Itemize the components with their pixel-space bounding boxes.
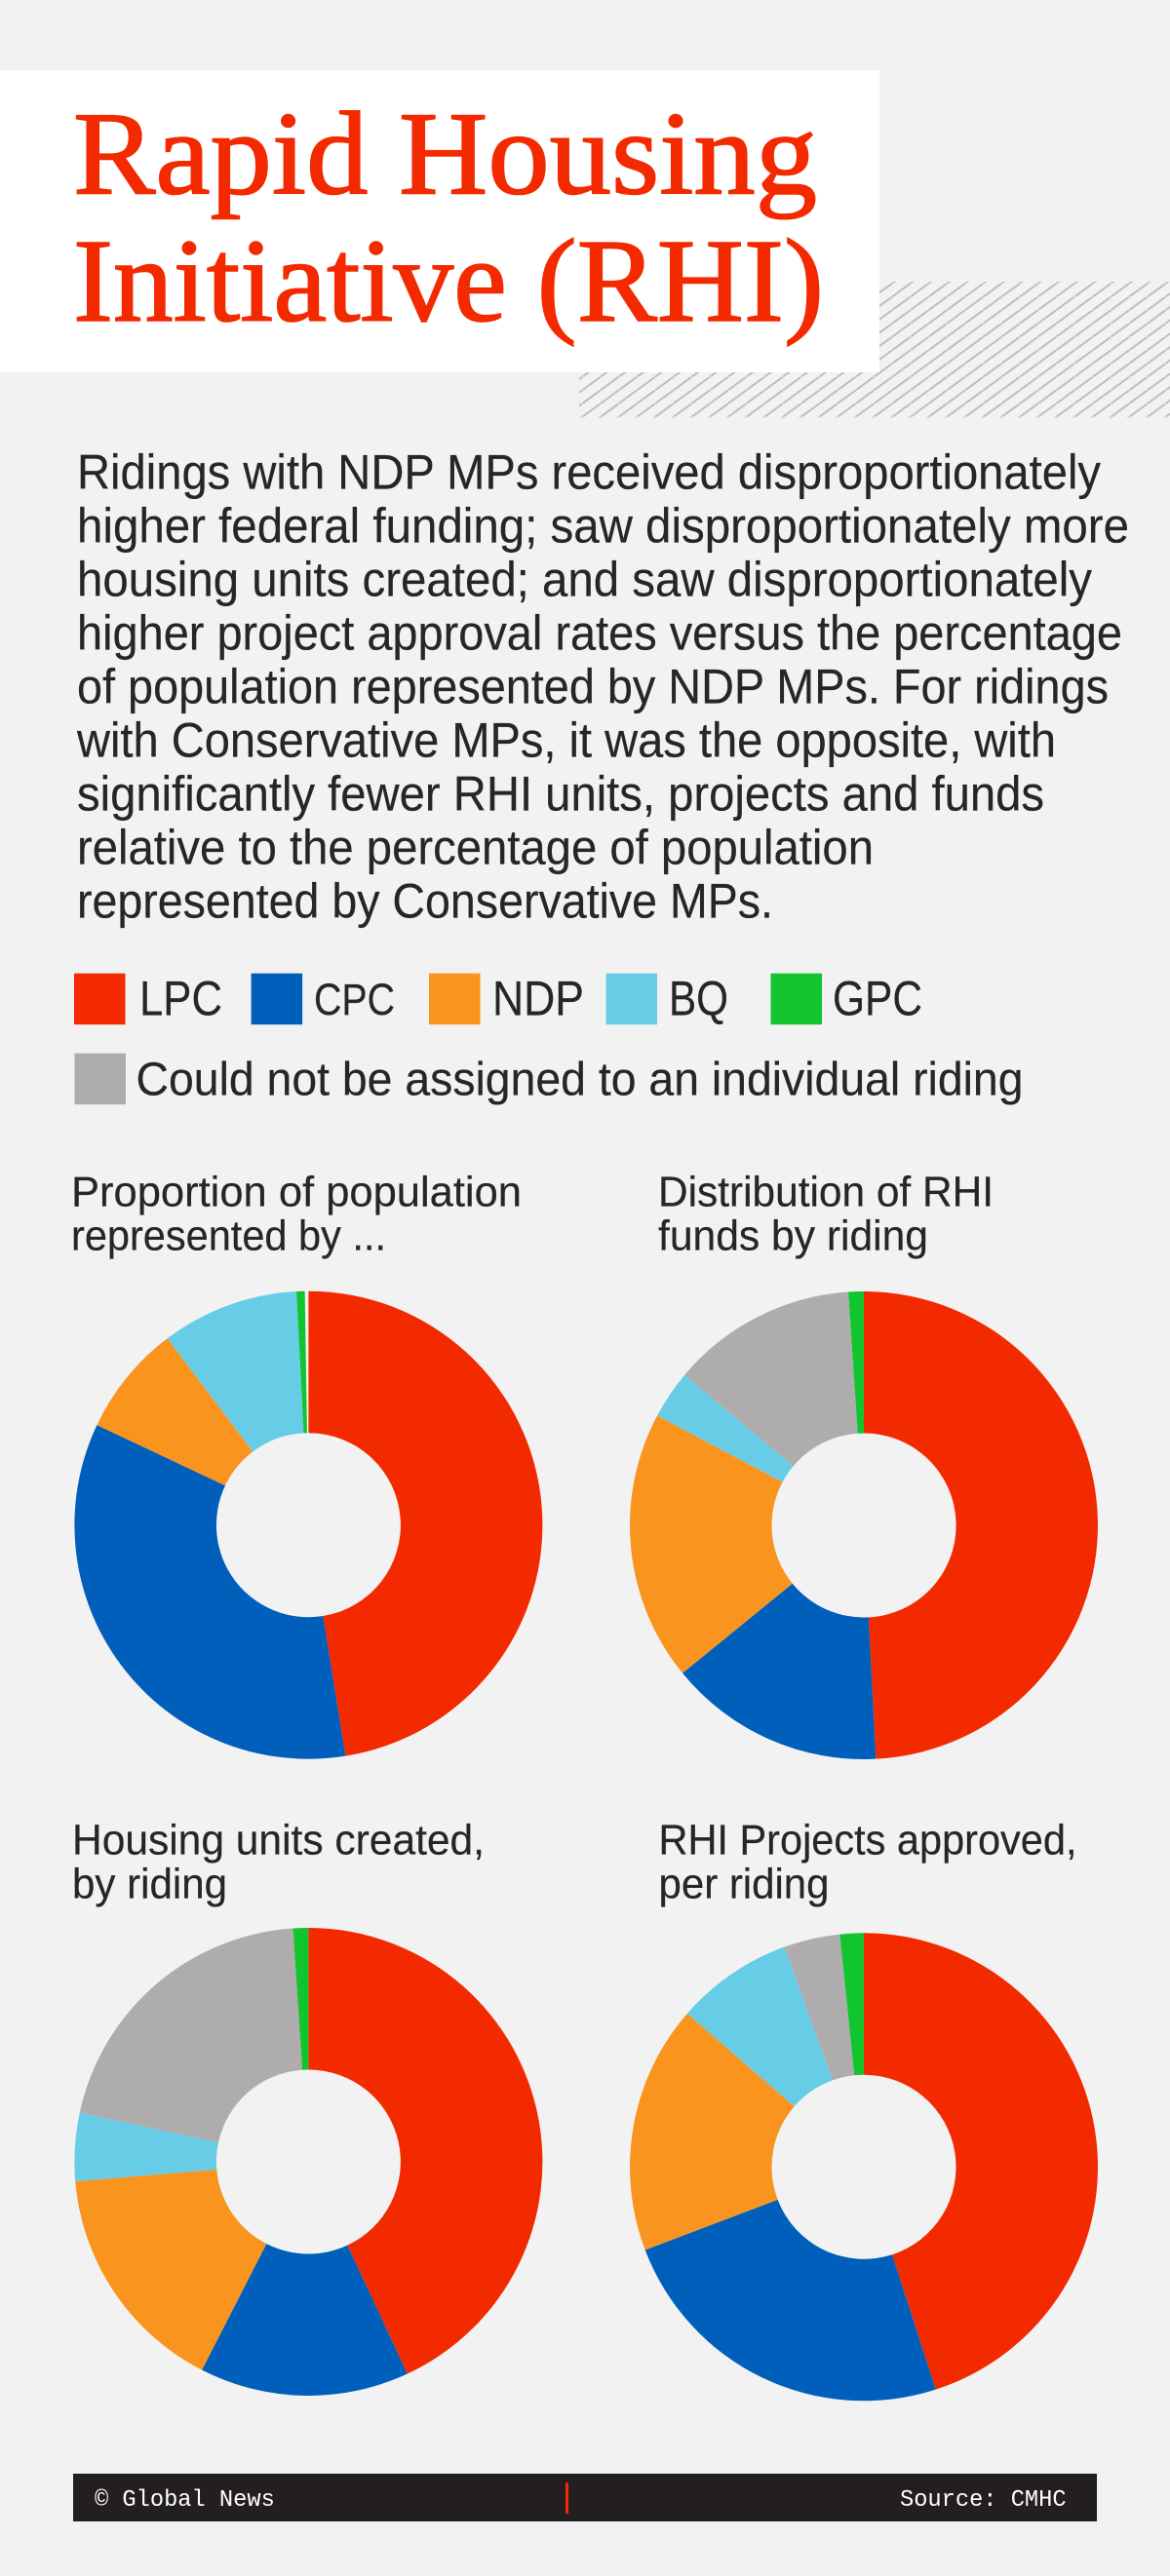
chart heading: funds: Distribution of RHI	[658, 1170, 994, 1216]
summary text block: relative to the percentage of population	[77, 821, 874, 875]
slice: could not be assigned	[80, 1929, 302, 2142]
summary text block: represented by Conservative MPs.	[77, 874, 773, 929]
legend	[74, 971, 1024, 1105]
legend item: BQ: BQ	[669, 971, 728, 1025]
legend item: BQ	[606, 971, 728, 1025]
slice: LPC	[308, 1928, 542, 2374]
legend item: GPC: GPC	[833, 971, 922, 1025]
slice: LPC	[864, 1291, 1098, 1759]
legend item: could not be assigned: Could not be assigned to an individual riding	[136, 1054, 1024, 1105]
footer source: Source: CMHC	[900, 2487, 1067, 2514]
slice: CPC	[645, 2200, 936, 2401]
summary text block	[76, 445, 1129, 929]
summary text block: housing units created; and saw disproportionately	[77, 553, 1092, 607]
slice: could not be assigned	[784, 1935, 854, 2080]
slice: CPC	[202, 2244, 408, 2396]
slice: LPC	[864, 1933, 1098, 2390]
chart heading: population: Proportion of population	[71, 1170, 522, 1216]
slice: CPC	[682, 1584, 876, 1759]
slice: BQ	[74, 2113, 218, 2181]
chart heading: projects approved	[659, 1817, 1076, 1908]
legend item: GPC	[770, 971, 922, 1025]
chart heading: funds	[658, 1170, 994, 1260]
panel: housing units	[72, 1817, 542, 2396]
panel: projects approved	[630, 1817, 1098, 2401]
chart heading: housing units: Housing units created,	[72, 1817, 485, 1864]
slice: NDP	[97, 1338, 253, 1485]
title panel	[0, 70, 879, 372]
legend item: LPC: LPC	[139, 971, 222, 1025]
summary text block: higher project approval rates versus the percentage	[77, 606, 1122, 661]
panel: funds	[630, 1170, 1098, 1759]
panel: population	[71, 1170, 542, 1759]
slice: NDP	[75, 2170, 266, 2370]
slice: GPC	[848, 1291, 864, 1434]
slice: BQ	[168, 1291, 304, 1451]
title: Initiative (RHI)	[73, 215, 824, 347]
chart heading: projects approved: per riding	[659, 1862, 829, 1908]
legend item: CPC: CPC	[314, 975, 395, 1024]
donut chart: projects approved	[630, 1933, 1098, 2401]
slice: NDP	[630, 2014, 795, 2250]
donut chart: funds	[630, 1291, 1098, 1759]
summary text block: with Conservative MPs, it was the opposite, with	[76, 713, 1056, 768]
slice: LPC	[308, 1291, 542, 1756]
legend item: CPC	[252, 974, 395, 1024]
slice: GPC	[296, 1291, 307, 1433]
slice: BQ	[687, 1947, 833, 2106]
slice: could not be assigned	[684, 1292, 858, 1466]
legend item: LPC	[74, 971, 222, 1025]
footer credit: © Global News	[95, 2487, 275, 2514]
legend item: NDP: NDP	[492, 971, 584, 1025]
chart heading: housing units	[72, 1817, 485, 1908]
chart heading: projects approved: RHI Projects approved,	[659, 1817, 1076, 1864]
chart heading: funds: funds by riding	[658, 1213, 928, 1260]
title: Rapid Housing	[73, 88, 817, 219]
footer bar	[73, 2474, 1097, 2521]
slice: BQ	[657, 1375, 794, 1482]
summary text block: Ridings with NDP MPs received disproportionately	[77, 445, 1101, 500]
slice: GPC	[292, 1928, 308, 2070]
chart heading: population: represented by ...	[71, 1213, 386, 1260]
summary text block: of population represented by NDP MPs. For ridings	[77, 660, 1109, 714]
slice: CPC	[74, 1425, 345, 1759]
donut chart: population	[74, 1291, 542, 1759]
title	[73, 88, 824, 347]
chart heading: housing units: by riding	[72, 1862, 227, 1908]
chart heading: population	[71, 1170, 522, 1260]
legend item: NDP	[429, 971, 584, 1025]
slice: GPC	[839, 1933, 864, 2075]
summary text block: significantly fewer RHI units, projects and funds	[77, 767, 1044, 822]
donut chart: housing units	[74, 1928, 542, 2396]
summary text block: higher federal funding; saw disproportionately more	[77, 499, 1129, 554]
slice: NDP	[630, 1415, 793, 1673]
